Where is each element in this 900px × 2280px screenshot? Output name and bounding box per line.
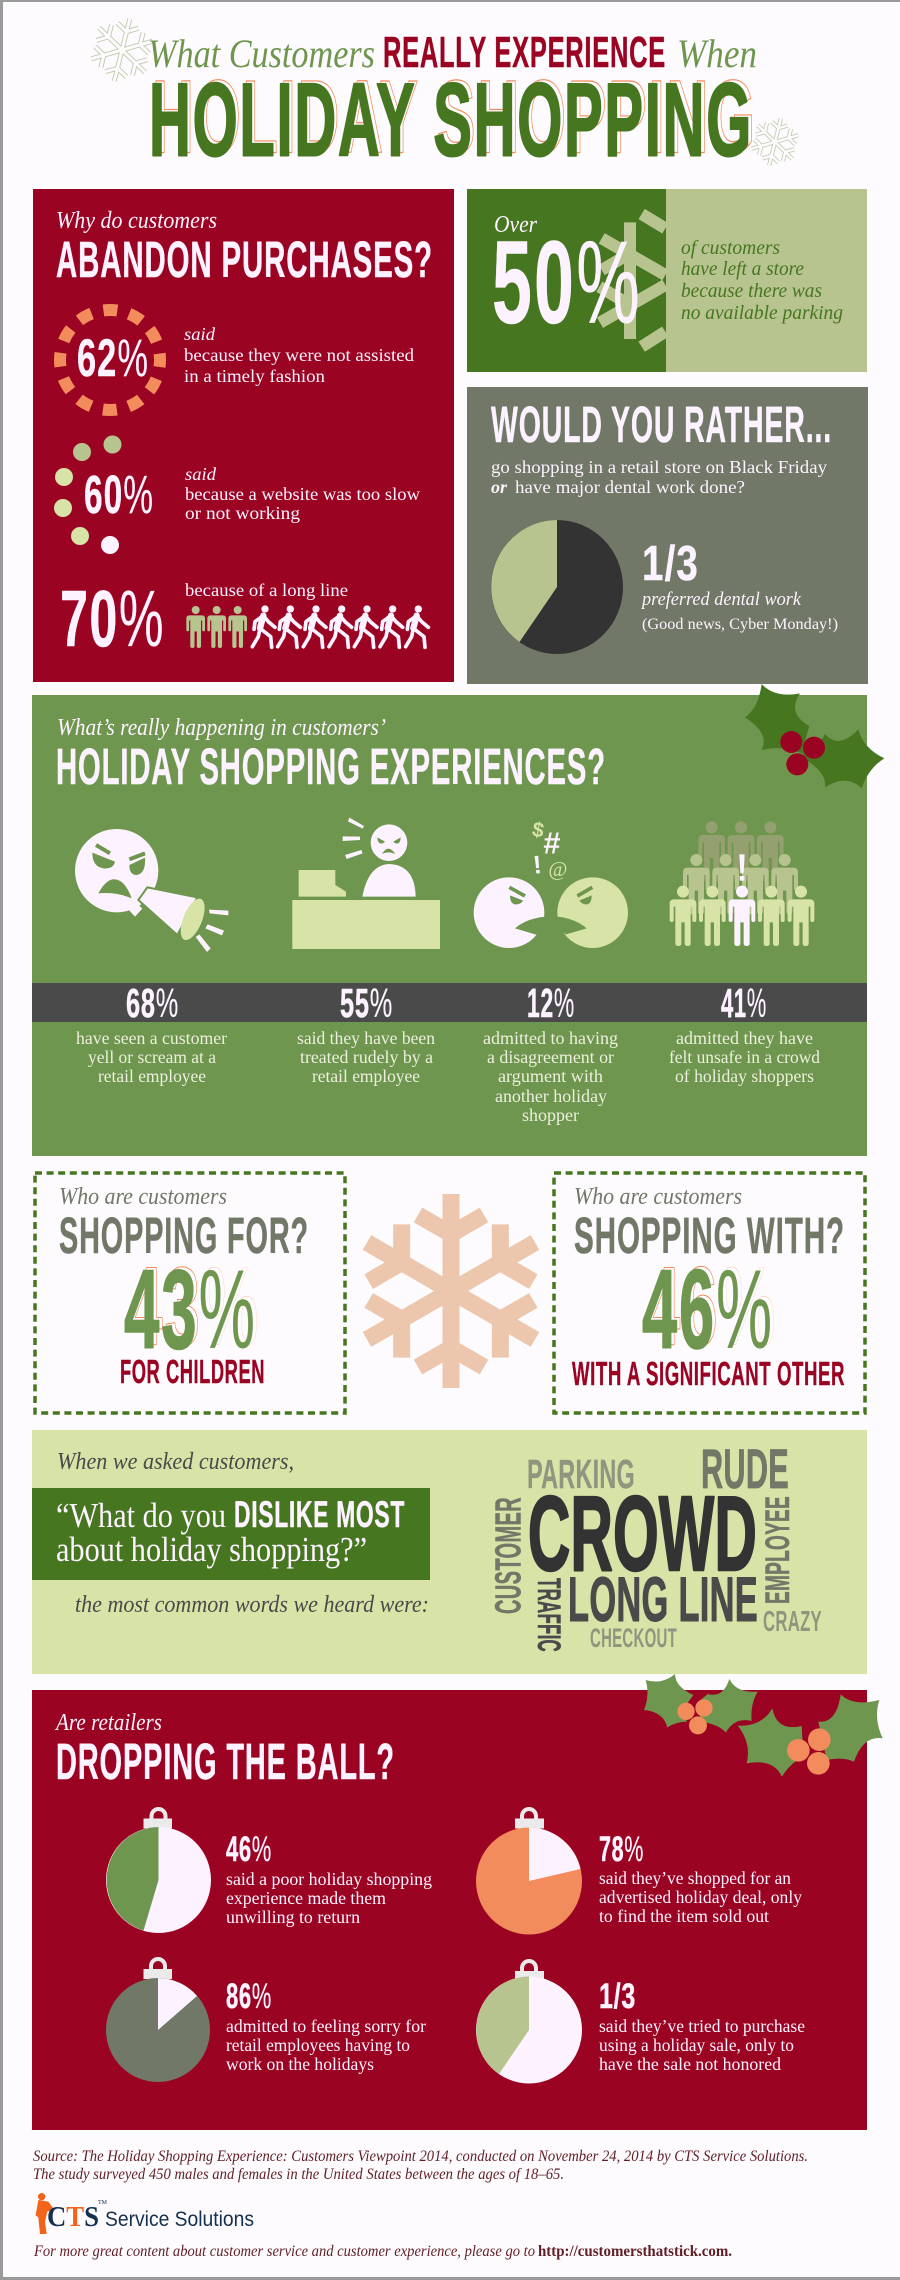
text: column one: yell or scream at a (88, 1047, 216, 1067)
stat: 60%: 60% (84, 465, 154, 525)
stat: 46%: 46% (642, 1247, 774, 1372)
icon: two arguing customers: @ (548, 859, 567, 881)
quote box: “What do you (56, 1496, 226, 1535)
text: column three: admitted to having (483, 1028, 618, 1048)
text: column three (483, 1028, 618, 1125)
text: one third: using a holiday sale, only to (599, 2035, 794, 2055)
ornament chart: 86% (106, 1959, 210, 2082)
panel: dropping the ball (32, 1674, 883, 2130)
quote box: about holiday shopping?” (56, 1530, 367, 1569)
text: column three: shopper (522, 1105, 579, 1125)
icon: crowd of shoppers (670, 821, 814, 946)
heading: ABANDON PURCHASES? (56, 231, 433, 288)
text: 46%: experience made them (226, 1888, 386, 1908)
text: parking description: no available parking (681, 302, 843, 324)
text: question: go shopping in a retail store on Black Friday (491, 457, 827, 477)
chart: word cloud: EMPLOYEE (759, 1496, 797, 1604)
trademark: TM (98, 2200, 108, 2206)
panel: shopping with (554, 1173, 865, 1413)
text: 78%: 78% (599, 1830, 644, 1869)
text: column four: felt unsafe in a crowd (669, 1047, 820, 1067)
icon: holly (745, 684, 884, 788)
text: intro: When we asked customers, (57, 1449, 294, 1475)
text: one third (599, 1977, 805, 2074)
icon: holly pair (644, 1674, 883, 1777)
text: column two (297, 1028, 435, 1086)
logo tagline: Service Solutions (105, 2208, 254, 2231)
icon: cropped snowflake (599, 214, 665, 347)
text: column two: said they have been (297, 1028, 435, 1048)
source note (33, 2148, 808, 2183)
text: column three: a disagreement or (487, 1047, 614, 1067)
subheading: What’s really happening in customers’ (57, 715, 386, 741)
text: 46%: 46% (226, 1830, 272, 1869)
text: 86%: 86% (226, 1977, 272, 2016)
chart: word cloud: RUDE (701, 1437, 789, 1500)
icon: large snowflake (350, 1194, 552, 1388)
chart: word cloud: TRAFFIC (531, 1578, 567, 1652)
ornament chart: one third (476, 1961, 582, 2084)
stat: 43%: 43% (124, 1247, 257, 1372)
panel: abandon purchases (33, 189, 454, 682)
title line one: When (677, 31, 757, 76)
text: 78%: advertised holiday deal, only (599, 1887, 802, 1907)
icon: snowflake bottom right (745, 112, 805, 172)
text: column four: admitted they have (676, 1028, 813, 1048)
source note: The study surveyed 450 males and females in the United States between the ages of 18–65. (33, 2166, 564, 2183)
text: column three: argument with (498, 1066, 603, 1086)
stat: 70%: 70% (60, 574, 165, 663)
ornament chart: 46% (106, 1809, 211, 1933)
icon: two arguing customers: # (543, 826, 561, 860)
text: column four (669, 1028, 820, 1086)
text: one third: have the sale not honored (599, 2054, 781, 2074)
text: column three: another holiday (495, 1086, 607, 1106)
text: 60% description: because a website was too slow (185, 484, 420, 504)
title line one: What Customers (148, 31, 375, 76)
chart: word cloud: CHECKOUT (590, 1623, 677, 1653)
panel: would you rather (467, 387, 868, 684)
quote box: DISLIKE MOST (234, 1494, 405, 1535)
logo (36, 2193, 254, 2234)
text: outro: the most common words we heard were: (75, 1592, 429, 1618)
stat: 46%: 46% (645, 1244, 778, 1369)
icon: upset clerk at counter (292, 818, 440, 949)
text: column one: have seen a customer (76, 1028, 227, 1048)
stat: 62%: 62% (77, 329, 149, 388)
text: 86%: work on the holidays (226, 2054, 374, 2074)
icon: figure (36, 2193, 54, 2234)
title (82, 11, 805, 179)
logo wordmark: CTS (47, 2202, 99, 2233)
text: dental: preferred dental work (640, 589, 802, 610)
text: column four: of holiday shoppers (675, 1066, 814, 1086)
text: parking description (681, 237, 843, 324)
text: long line: because of a long line (185, 580, 348, 600)
text: 78% (599, 1830, 802, 1926)
text: one third: 1/3 (599, 1977, 636, 2016)
icon: two arguing customers: ! (532, 851, 544, 880)
text: 62% description: said (184, 324, 216, 344)
title line one: REALLY EXPERIENCE (383, 28, 666, 77)
panel: parking (467, 189, 867, 372)
subheading: Who are customers (574, 1184, 742, 1210)
text: 86% (226, 1977, 426, 2074)
text: 60% description: said (185, 464, 217, 484)
icon: dashed ring (60, 310, 160, 410)
text: 62% description (184, 324, 414, 386)
text: 60% description: or not working (185, 503, 300, 523)
footer link line: For more great content about customer service and customer experience, please go to (33, 2243, 535, 2260)
stat bar: 41% (721, 980, 767, 1026)
text: 62% description: because they were not assisted (184, 345, 414, 365)
text: 62% description: in a timely fashion (184, 366, 325, 386)
subheading: Why do customers (56, 208, 217, 234)
chart: word cloud: PARKING (527, 1451, 635, 1497)
text: one third: said they’ve tried to purchase (599, 2016, 805, 2036)
footer link line: http://customersthatstick.com. (538, 2243, 732, 2260)
text: column one (76, 1028, 227, 1086)
chart: word cloud: CRAZY (763, 1606, 822, 1638)
heading: SHOPPING FOR? (59, 1207, 309, 1264)
icon: two arguing customers (474, 818, 628, 948)
text: parking description: have left a store (681, 258, 804, 280)
text: 78%: said they’ve shopped for an (599, 1868, 791, 1888)
text: 60% description (185, 464, 420, 523)
icon: snowflake top left (82, 11, 162, 89)
text: 78%: to find the item sold out (599, 1906, 769, 1926)
panel: shopping for (35, 1173, 345, 1413)
text: question (491, 457, 827, 497)
stat: 43%: 43% (127, 1244, 261, 1369)
text: question: or (491, 477, 508, 497)
text: 46% (226, 1830, 432, 1927)
text: dental (640, 589, 838, 633)
chart: word cloud: CUSTOMER (488, 1497, 528, 1614)
text: 86%: retail employees having to (226, 2035, 410, 2055)
title line one (148, 28, 757, 77)
text: column two: treated rudely by a (300, 1047, 433, 1067)
stat: 50%: 50% (492, 217, 642, 349)
text: dental: (Good news, Cyber Monday!) (642, 616, 838, 633)
quote box (32, 1488, 430, 1580)
stat bar: 68% (126, 980, 179, 1026)
text: for children: FOR CHILDREN (120, 1353, 265, 1390)
subheading: Are retailers (54, 1710, 162, 1736)
subheading: Who are customers (59, 1184, 227, 1210)
text: 46%: unwilling to return (226, 1907, 360, 1927)
stat: 1/3: 1/3 (642, 537, 699, 591)
stat bar: 12% (527, 980, 575, 1026)
chart: word cloud (488, 1437, 822, 1653)
icon: queue of people (186, 605, 428, 648)
ornament chart: 78% (476, 1809, 582, 1934)
panel: holiday shopping experiences (32, 684, 884, 1156)
icon: loading dots (54, 436, 122, 554)
text: over: Over (494, 212, 538, 238)
stat bar (32, 980, 867, 1026)
heading: DROPPING THE BALL? (56, 1733, 395, 1790)
text: column two: retail employee (312, 1066, 420, 1086)
text: question: have major dental work done? (515, 477, 745, 497)
source note: Source: The Holiday Shopping Experience: Customers Viewpoint 2014, conducted on November 24, 2014 by CTS Service Solutions. (33, 2148, 808, 2165)
text: column one: retail employee (98, 1066, 206, 1086)
text: 86%: admitted to feeling sorry for (226, 2016, 426, 2036)
text: 46%: said a poor holiday shopping (226, 1869, 432, 1889)
stat bar: 55% (340, 980, 393, 1026)
panel: word cloud (32, 1430, 867, 1674)
text: parking description: because there was (681, 280, 822, 302)
icon: two arguing customers: $ (530, 818, 546, 843)
text: parking description: of customers (681, 237, 780, 259)
chart: pie one third (491, 520, 623, 654)
icon: yelling customer with megaphone (75, 829, 228, 952)
